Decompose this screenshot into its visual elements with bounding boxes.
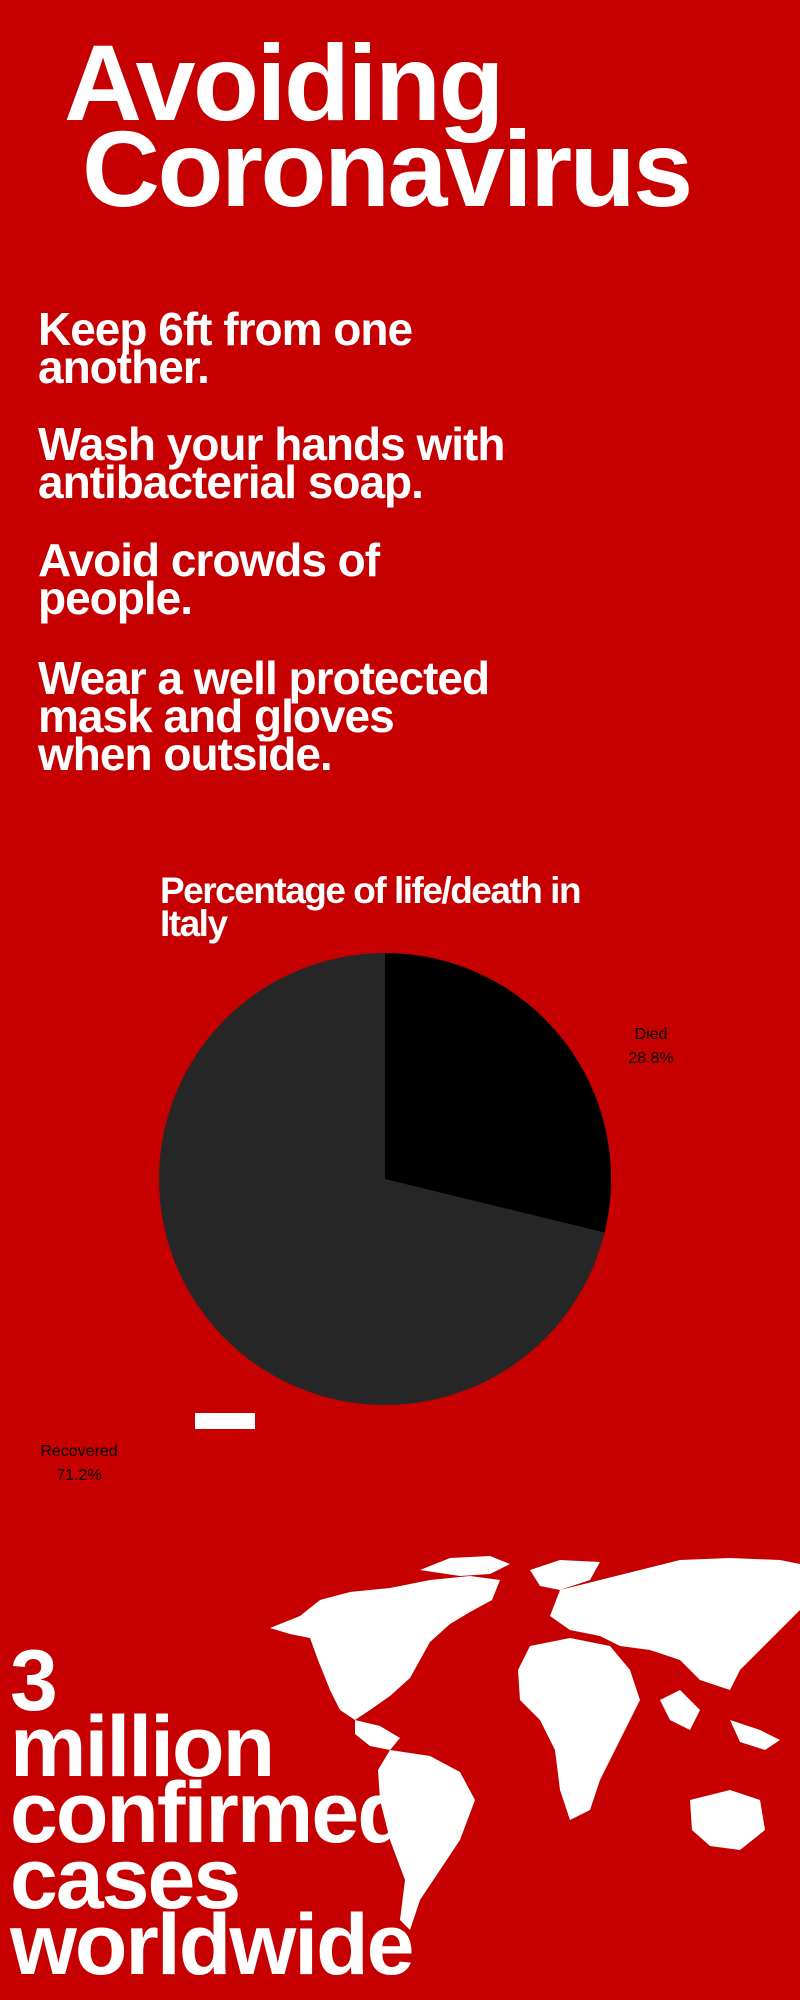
tip: mask	[38, 652, 489, 780]
title: Avoiding	[64, 22, 502, 143]
legend bar	[195, 1413, 255, 1429]
cases statistic: cases	[10, 1831, 239, 1927]
cases statistic: million	[10, 1699, 273, 1795]
label: died: Died	[635, 1026, 667, 1043]
tip: wash hands: Wash your hands with	[38, 418, 504, 470]
cases statistic	[10, 1633, 412, 1993]
tip: wash hands	[38, 418, 504, 508]
tip: mask: when outside.	[38, 728, 332, 780]
pie chart	[159, 953, 612, 1405]
title: Coronavirus	[82, 108, 691, 229]
label: recovered: Recovered	[40, 1443, 118, 1460]
chart title: Percentage of life/death in	[160, 870, 580, 911]
tip: mask: Wear a well protected	[38, 652, 489, 704]
label: recovered	[40, 1443, 118, 1484]
label: died	[628, 1026, 674, 1067]
tip: distance: Keep 6ft from one	[38, 303, 412, 355]
tip: avoid crowds: people.	[38, 572, 192, 624]
tip: avoid crowds: Avoid crowds of	[38, 534, 379, 586]
tip: avoid crowds	[38, 534, 380, 624]
cases statistic: 3	[10, 1633, 56, 1729]
chart title: Italy	[160, 903, 227, 944]
tip: distance: another.	[38, 341, 209, 393]
title	[64, 22, 691, 229]
tip: wash hands: antibacterial soap.	[38, 456, 423, 508]
label: died: 28.8%	[628, 1050, 674, 1067]
tip: mask: mask and gloves	[38, 690, 394, 742]
cases statistic: confirmed	[10, 1765, 408, 1861]
cases statistic: worldwide	[10, 1897, 412, 1993]
tip: distance	[38, 303, 412, 393]
label: recovered: 71.2%	[56, 1467, 102, 1484]
chart title	[160, 870, 580, 944]
world map	[270, 1556, 800, 1930]
